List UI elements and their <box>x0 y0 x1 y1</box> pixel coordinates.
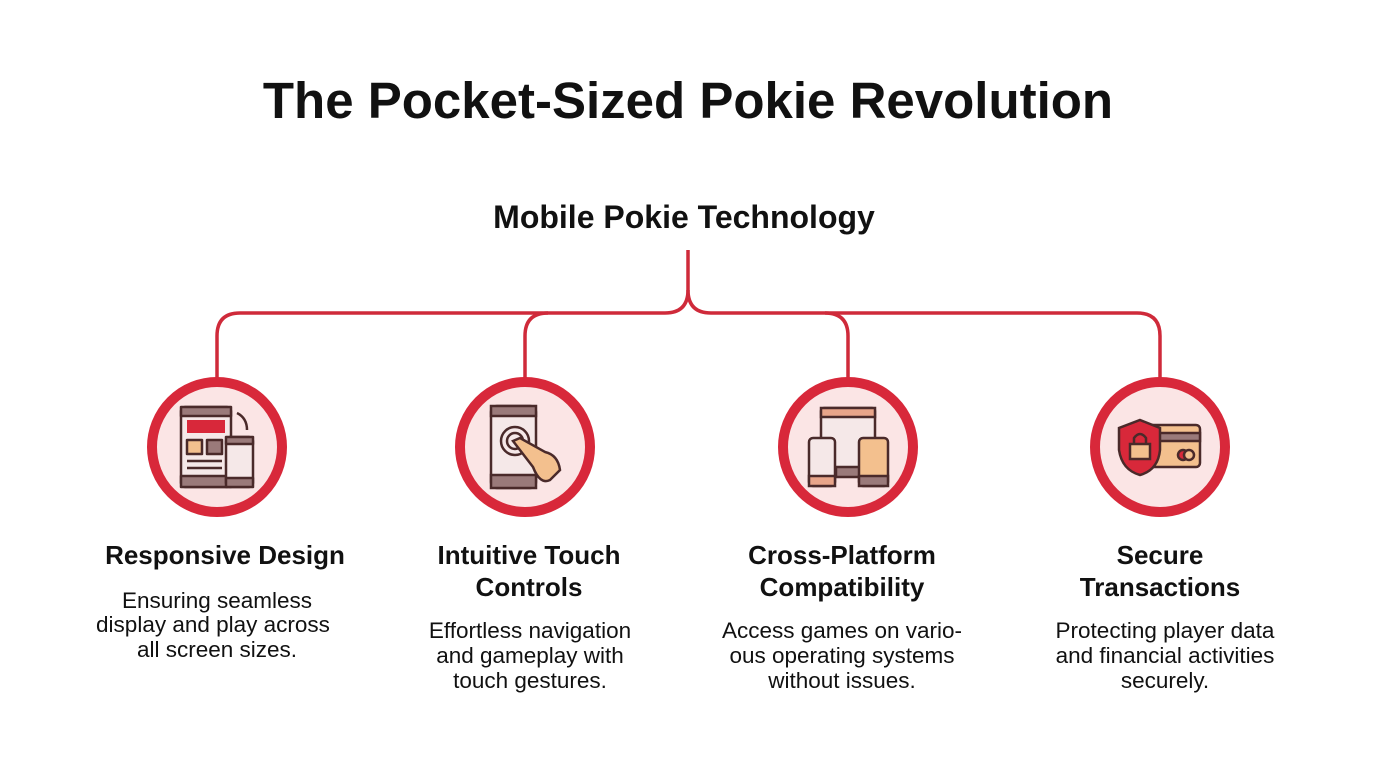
panel: cross-platform text <box>722 540 962 693</box>
panel: secure transactions text: Protecting player data <box>1056 618 1275 643</box>
panel: secure transactions text: and financial activities <box>1056 643 1274 668</box>
panel: responsive design text: all screen sizes. <box>137 637 297 662</box>
panel: touch controls text: Effortless navigation <box>429 618 631 643</box>
icon: responsive design <box>152 382 282 512</box>
panel: cross-platform text: Cross-Platform <box>748 540 936 570</box>
panel: responsive design text <box>96 540 345 662</box>
panel: cross-platform text: ous operating systems <box>729 643 955 668</box>
title: The Pocket-Sized Pokie Revolution <box>263 72 1113 129</box>
panel: touch controls text: touch gestures. <box>453 668 607 693</box>
panel: secure transactions text: Transactions <box>1080 572 1240 602</box>
panel: secure transactions text: Secure <box>1117 540 1203 570</box>
panel: responsive design text: display and play across <box>96 612 330 637</box>
panel: cross-platform text: Access games on vario- <box>722 618 962 643</box>
panel: secure transactions text <box>1056 540 1275 693</box>
panel: cross-platform text: Compatibility <box>760 572 925 602</box>
panel: touch controls text: Controls <box>476 572 582 602</box>
icon: secure transactions <box>1095 382 1225 512</box>
icon: touch controls <box>460 382 590 512</box>
icon: cross-platform <box>783 382 913 512</box>
panel: secure transactions text: securely. <box>1121 668 1209 693</box>
panel: touch controls text: and gameplay with <box>436 643 624 668</box>
panel: responsive design text: Responsive Design <box>105 540 345 570</box>
connector tree <box>217 250 1160 378</box>
panel: responsive design text: Ensuring seamless <box>122 588 312 613</box>
panel: touch controls text: Intuitive Touch <box>438 540 620 570</box>
panel: cross-platform text: without issues. <box>767 668 916 693</box>
subtitle: Mobile Pokie Technology: Mobile Pokie Technology <box>493 199 875 235</box>
panel: touch controls text <box>429 540 631 693</box>
